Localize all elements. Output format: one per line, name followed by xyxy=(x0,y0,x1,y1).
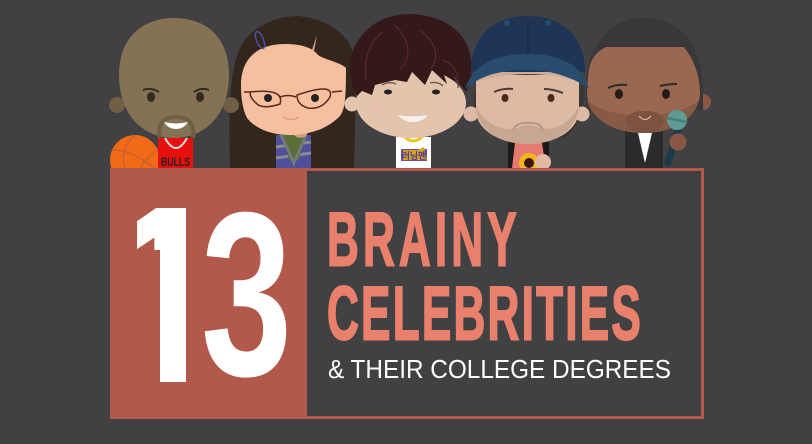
number 13: 3 xyxy=(201,163,292,425)
number 13: 1 xyxy=(100,153,230,436)
character: man with microphone xyxy=(586,18,711,170)
infographic xyxy=(109,14,711,419)
subtitle: & THEIR COLLEGE DEGREES xyxy=(328,354,671,384)
character: young man with brown hair: 러닝맨 xyxy=(402,150,426,161)
number panel xyxy=(110,168,307,419)
title panel xyxy=(110,168,702,419)
heading: Brainy: BRAINY xyxy=(327,198,517,283)
character: basketball player xyxy=(109,18,239,185)
heading: Celebrities: CELEBRITIES xyxy=(327,272,641,357)
character: basketball player: BULLS xyxy=(161,155,190,169)
number 13 xyxy=(137,208,286,382)
character: young man with brown hair xyxy=(344,14,472,170)
character: man in blue cap xyxy=(464,16,590,173)
character: woman with glasses xyxy=(229,16,355,168)
